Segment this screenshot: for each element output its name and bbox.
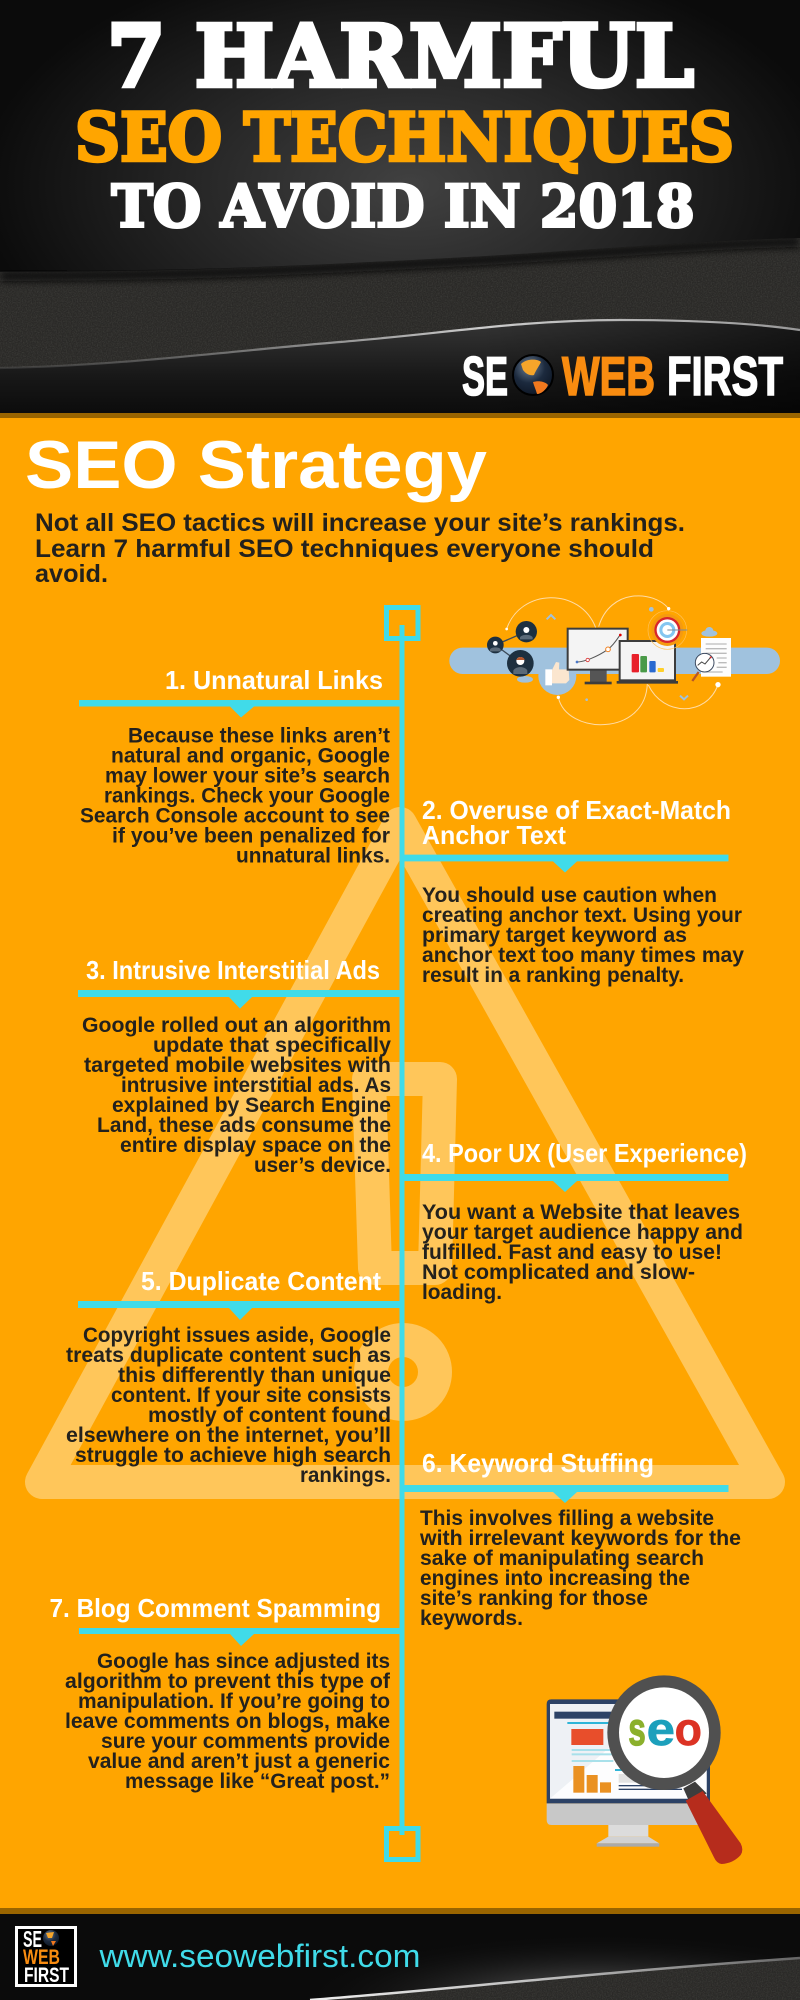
body text: Not complicated and slow- <box>422 1261 695 1284</box>
seo wordmark: s <box>628 1703 646 1755</box>
body text <box>422 884 744 987</box>
icon: document and magnifier <box>692 627 731 681</box>
body text: Because these links aren’t <box>128 724 390 748</box>
body text: with irrelevant keywords for the <box>419 1527 741 1550</box>
body text: targeted mobile websites with <box>84 1054 391 1077</box>
title line 3: TO AVOID IN 2018 <box>112 172 694 240</box>
footer url: www.seowebfirst.com <box>98 1938 421 1974</box>
title line 1: 7 HARMFUL <box>107 7 694 107</box>
panel: footer <box>0 1908 800 2000</box>
heading: 3. Intrusive Interstitial Ads <box>86 955 380 985</box>
footer logo: SE <box>23 1926 42 1952</box>
body text: Land, these ads consume the <box>97 1114 391 1137</box>
body text: site’s ranking for those <box>420 1587 648 1610</box>
intro paragraph: avoid. <box>35 560 108 588</box>
body text: if you’ve been penalized for <box>112 824 390 848</box>
title line 2: SEO TECHNIQUES <box>75 98 734 176</box>
icon: target <box>648 611 687 649</box>
body text: Google rolled out an algorithm <box>82 1014 391 1037</box>
body text: You want a Website that leaves <box>422 1201 740 1224</box>
logo: SEO WEB FIRST: SE <box>462 345 508 407</box>
body text <box>422 1201 743 1304</box>
heading: SEO Strategy: SEO Strategy <box>25 427 487 503</box>
seo wordmark: o <box>675 1703 702 1755</box>
body text: treats duplicate content such as <box>66 1344 391 1367</box>
body text: update that specifically <box>153 1034 391 1057</box>
body text: unnatural links. <box>236 844 390 868</box>
illustration: analytics <box>449 596 780 725</box>
footer logo: FIRST <box>24 1964 69 1987</box>
body text <box>65 1650 391 1793</box>
heading: 4. Poor UX (User Experience) <box>422 1138 747 1168</box>
item 3: Intrusive Interstitial Ads <box>78 955 402 1177</box>
body text <box>80 724 390 868</box>
body text: sake of manipulating search <box>420 1547 704 1570</box>
panel: dark header <box>0 0 800 418</box>
heading: 1. Unnatural Links <box>165 665 383 695</box>
body text: rankings. Check your Google <box>104 784 390 808</box>
icon: laptop with bar chart <box>617 640 678 684</box>
body text: keywords. <box>420 1607 523 1630</box>
body text: Search Console account to see <box>80 804 390 828</box>
body text: sure your comments provide <box>101 1730 390 1753</box>
body text: entire display space on the <box>120 1134 391 1157</box>
intro paragraph <box>35 509 685 588</box>
connector <box>402 1485 728 1503</box>
item 6: Keyword Stuffing <box>402 1448 741 1630</box>
connector <box>79 700 402 718</box>
connector <box>402 1174 728 1192</box>
body text: algorithm to prevent this type of <box>65 1670 391 1693</box>
item 5: Duplicate Content <box>66 1266 402 1487</box>
icon: small globe <box>43 1930 59 1946</box>
heading: 6. Keyword Stuffing <box>422 1448 654 1478</box>
item 1: Unnatural Links <box>79 665 402 868</box>
icon: thumbs up <box>538 657 576 695</box>
seo wordmark <box>628 1703 702 1755</box>
icon: people network <box>487 621 537 683</box>
body text: primary target keyword as <box>422 924 687 947</box>
heading: 5. Duplicate Content <box>141 1266 381 1296</box>
monitor <box>547 1699 710 1847</box>
body text: may lower your site’s search <box>105 764 390 788</box>
footer logo <box>16 1926 76 1987</box>
body text: this differently than unique <box>118 1364 391 1387</box>
body text: You should use caution when <box>422 884 717 907</box>
body text <box>419 1507 741 1630</box>
body text: elsewhere on the internet, you’ll <box>66 1424 391 1447</box>
body text: explained by Search Engine <box>112 1094 391 1117</box>
heading: 7. Blog Comment Spamming <box>50 1593 381 1623</box>
body text: result in a ranking penalty. <box>422 964 684 987</box>
logo: SEO WEB FIRST: WEB <box>562 345 655 407</box>
body text: mostly of content found <box>148 1404 391 1427</box>
connector <box>79 1628 402 1646</box>
timeline start square <box>386 608 418 638</box>
body text: loading. <box>422 1281 502 1304</box>
body text: Copyright issues aside, Google <box>83 1324 391 1347</box>
body text: your target audience happy and <box>422 1221 743 1244</box>
body text: rankings. <box>300 1464 391 1487</box>
logo: SEO WEB FIRST <box>462 345 783 407</box>
connector <box>78 1301 402 1320</box>
timeline end square <box>386 1828 418 1860</box>
body text <box>66 1324 391 1487</box>
body text: intrusive interstitial ads. As <box>121 1074 391 1097</box>
body text: content. If your site consists <box>111 1384 391 1407</box>
timeline <box>386 608 418 1860</box>
body text: message like “Great post.” <box>125 1770 390 1793</box>
connector <box>78 990 402 1009</box>
icon: globe <box>513 355 553 395</box>
body text: fulfilled. Fast and easy to use! <box>422 1241 722 1264</box>
body text: Google has since adjusted its <box>97 1650 390 1673</box>
heading <box>422 795 731 850</box>
orange body background <box>0 418 800 1908</box>
title <box>75 7 734 240</box>
footer logo: WEB <box>23 1946 60 1969</box>
body text: anchor text too many times may <box>422 944 744 967</box>
magnifier <box>607 1675 742 1864</box>
icon: monitor with line chart <box>567 628 629 684</box>
body text: This involves filling a website <box>420 1507 714 1530</box>
body text: value and aren’t just a generic <box>88 1750 390 1773</box>
heading: 2. Overuse of Exact-Match <box>422 795 731 825</box>
item 7: Blog Comment Spamming <box>50 1593 402 1793</box>
item 2: Overuse of Exact-Match Anchor Text <box>402 795 744 987</box>
heading: Anchor Text <box>422 820 566 850</box>
intro paragraph: Learn 7 harmful SEO techniques everyone should <box>35 535 654 563</box>
body text: natural and organic, Google <box>111 744 390 768</box>
body text: leave comments on blogs, make <box>65 1710 390 1733</box>
illustration: SEO magnifier over monitor <box>547 1675 742 1864</box>
seo wordmark: e <box>647 1703 675 1755</box>
body text: manipulation. If you’re going to <box>78 1690 390 1713</box>
item 4: Poor UX <box>402 1138 747 1304</box>
connector <box>402 855 728 872</box>
watermark: warning triangle <box>42 824 768 1482</box>
intro paragraph: Not all SEO tactics will increase your site’s rankings. <box>35 509 685 537</box>
body text: struggle to achieve high search <box>75 1444 391 1467</box>
body text: engines into increasing the <box>420 1567 690 1590</box>
body text: user’s device. <box>254 1154 391 1177</box>
body text: creating anchor text. Using your <box>422 904 742 927</box>
body text <box>82 1014 391 1177</box>
